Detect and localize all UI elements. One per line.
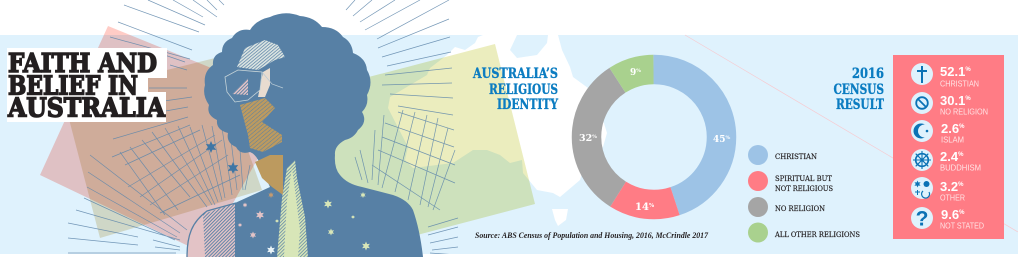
donut labels: % [726,135,731,141]
icon: question mark [911,207,933,230]
stat: Other: % [958,182,964,188]
title: BELIEF IN [8,72,138,102]
map of Australia [388,35,607,226]
stat: Buddhism [940,149,981,172]
stat: Buddhism: 2.4 [940,149,958,164]
stat: Other: OTHER [940,192,965,202]
heading: 2016 census result: RESULT [836,97,884,113]
stat: No religion: NO RELIGION [940,106,988,116]
heading: 2016 census result: 2016 [852,66,884,82]
stat: Buddhism: BUDDHISM [940,162,981,172]
donut chart [586,70,722,204]
donut labels: 32 [579,133,592,144]
legend: ALL OTHER RELIGIONS [774,230,860,239]
heading: Australia's religious identity: AUSTRALIA’S [472,66,558,82]
stat: Christian: CHRISTIAN [940,78,979,88]
stat: Islam: ISLAM [941,134,964,144]
stat: Christian: % [965,67,971,73]
donut labels: 45 [713,135,726,145]
icon: question mark: ? [916,208,928,230]
stat: Other [940,179,965,202]
heading: 2016 census result: CENSUS [834,82,884,98]
legend: CHRISTIAN [775,152,817,161]
heading: 2016 census result [834,66,884,113]
sunglasses [225,70,283,102]
stat: No religion: 30.1 [940,93,965,108]
donut labels: % [649,203,655,209]
stars [206,141,370,254]
portrait figure [187,13,423,257]
title [7,48,167,124]
icon: cross [911,63,933,85]
legend [748,145,860,242]
donut labels: % [592,134,597,140]
source note: Source: ABS Census of Population and Housing, 2016, McCrindle 2017 [475,230,709,240]
legend: NOT RELIGIOUS [775,184,833,193]
stat: Not stated: NOT STATED [940,220,984,230]
coloured rectangles [40,26,535,254]
collar [277,160,308,257]
panel: census results [893,55,1004,239]
forehead highlight [237,40,285,70]
legend: NO RELIGION [775,204,825,213]
stat: Not stated: % [959,210,965,216]
face hatching [240,98,282,152]
stat: Christian [940,64,979,88]
icon: no religion [911,92,933,114]
donut labels [579,68,731,213]
bottom white strip [0,254,185,257]
donut labels: % [636,68,641,74]
hair and body silhouette [204,13,423,257]
stat: Other: 3.2 [940,179,958,194]
heading: Australia's religious identity: RELIGIOUS [489,82,558,98]
stat: No religion [940,93,988,116]
icon: dharma wheel [911,149,933,171]
stat: Islam [941,121,965,144]
heading: Australia's religious identity: IDENTITY [497,97,558,113]
donut labels: 9 [630,68,636,78]
stat: Buddhism: % [958,152,964,158]
sunburst rays [68,0,458,255]
shirt left hatch [187,203,236,257]
stat: Not stated [940,207,984,230]
neck hatching [255,155,283,195]
stat: Christian: 52.1 [940,64,965,79]
title: AUSTRALIA [7,94,166,124]
heading: Australia's religious identity [472,66,558,113]
stat: Islam: 2.6 [941,121,959,136]
icon: other faiths [911,177,933,199]
title: FAITH AND [8,49,157,79]
stat: Islam: % [959,124,965,130]
skin beside glasses [258,68,270,97]
diagonal line [685,35,1018,232]
donut labels: 14 [635,202,649,213]
icon: crescent [911,120,933,142]
stat: No religion: % [965,96,971,102]
legend: SPIRITUAL BUT [775,174,832,183]
stat: Not stated: 9.6 [941,207,959,222]
